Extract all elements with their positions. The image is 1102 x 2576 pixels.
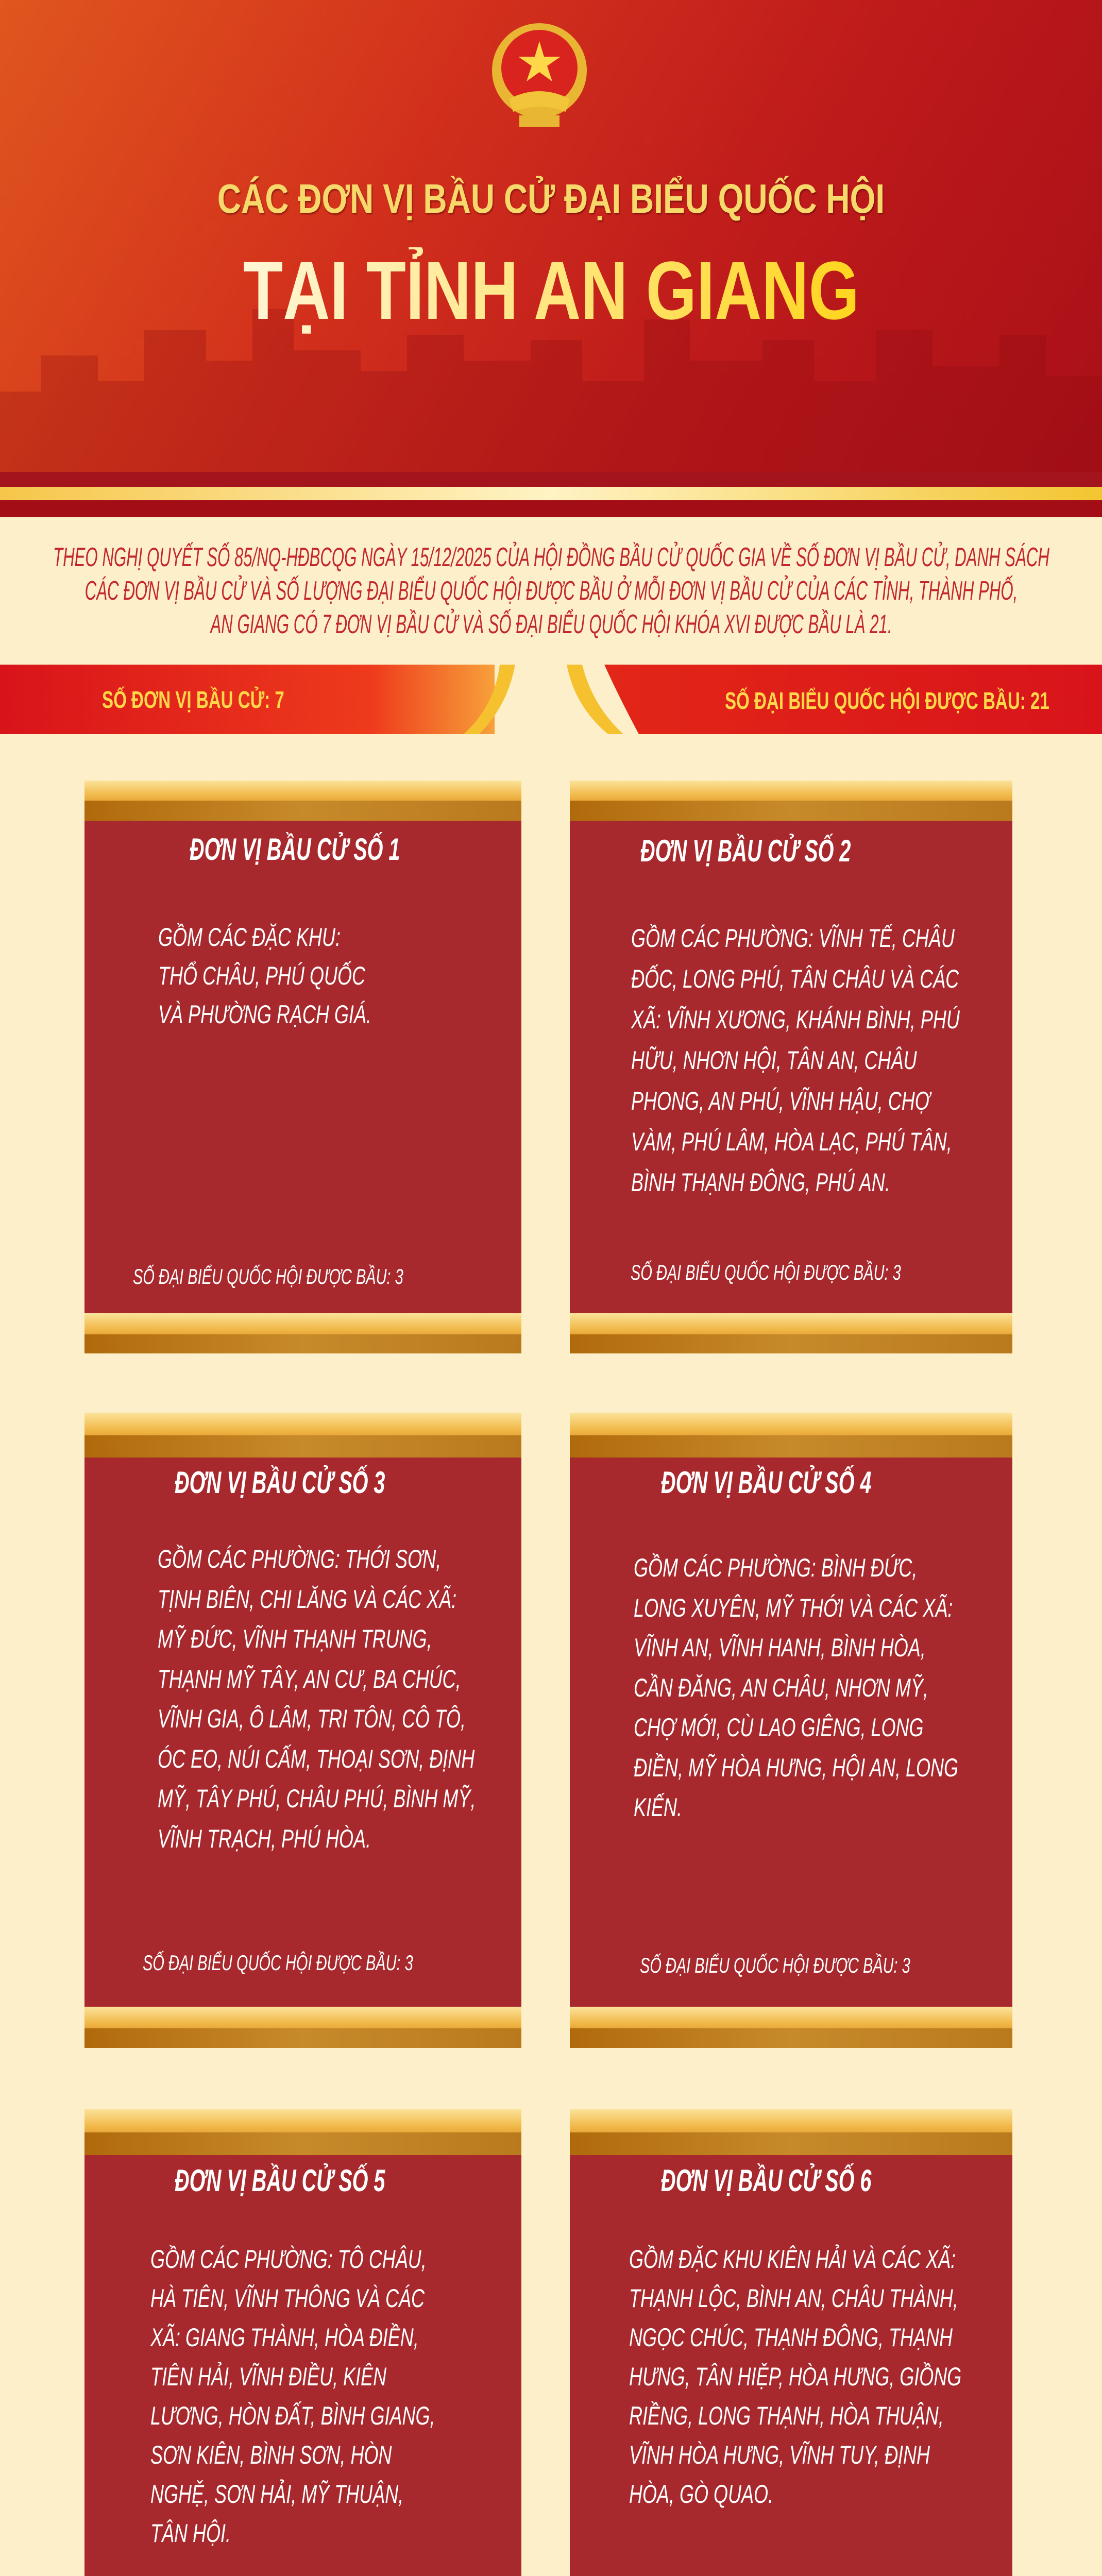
text block: TỊNH BIÊN, CHI LĂNG VÀ CÁC XÃ: bbox=[158, 1585, 456, 1614]
text block: GỒM CÁC ĐẶC KHU: bbox=[158, 923, 341, 952]
intro text: THEO NGHỊ QUYẾT SỐ 85/NQ-HĐBCQG NGÀY 15/12/2025 CỦA HỘI ĐỒNG BẦU CỬ QUỐC GIA VỀ SỐ ĐƠN VỊ BẦU CỬ, DANH SÁCH bbox=[53, 543, 1049, 572]
text block bbox=[634, 1553, 958, 1822]
text block: RIỀNG, LONG THẠNH, HÒA THUẬN, bbox=[629, 2401, 944, 2430]
text block: GỒM CÁC PHƯỜNG: VĨNH TẾ, CHÂU bbox=[631, 924, 955, 953]
header bbox=[0, 0, 1102, 517]
text block: GỒM CÁC PHƯỜNG: TÔ CHÂU, bbox=[150, 2245, 427, 2274]
text block: TIÊN HẢI, VĨNH ĐIỀU, KIÊN bbox=[150, 2362, 386, 2391]
text block: SƠN KIÊN, BÌNH SƠN, HÒN bbox=[150, 2441, 392, 2469]
heading: ĐƠN VỊ BẦU CỬ SỐ 3 bbox=[175, 1465, 385, 1500]
intro text: AN GIANG CÓ 7 ĐƠN VỊ BẦU CỬ VÀ SỐ ĐẠI BIỂU QUỐC HỘI KHÓA XVI ĐƯỢC BẦU LÀ 21. bbox=[210, 609, 892, 639]
text block bbox=[629, 2244, 961, 2509]
text block: TÂN HỘI. bbox=[150, 2519, 231, 2548]
text block: GỒM CÁC PHƯỜNG: THỚI SƠN, bbox=[158, 1545, 441, 1573]
panel: unit 4 bbox=[570, 1413, 1012, 2048]
text block: HƯNG, TÂN HIỆP, HÒA HƯNG, GIỒNG bbox=[629, 2362, 961, 2391]
text block: GỒM ĐẶC KHU KIÊN HẢI VÀ CÁC XÃ: bbox=[629, 2245, 956, 2274]
text block bbox=[631, 924, 960, 1197]
text block: HÒA, GÒ QUAO. bbox=[629, 2480, 773, 2509]
text block: XÃ: VĨNH XƯƠNG, KHÁNH BÌNH, PHÚ bbox=[631, 1005, 960, 1034]
banner: totals bbox=[0, 665, 1102, 734]
text block: ÓC EO, NÚI CẤM, THOẠI SƠN, ĐỊNH bbox=[158, 1744, 474, 1773]
heading: ĐƠN VỊ BẦU CỬ SỐ 5 bbox=[175, 2163, 385, 2198]
text block: NGHỆ, SƠN HẢI, MỸ THUẬN, bbox=[150, 2480, 403, 2509]
text block: BÌNH THẠNH ĐÔNG, PHÚ AN. bbox=[631, 1168, 890, 1197]
text block: GỒM CÁC PHƯỜNG: BÌNH ĐỨC, bbox=[634, 1553, 917, 1582]
skyline bbox=[0, 309, 1102, 517]
label: number of units: SỐ ĐƠN VỊ BẦU CỬ: 7 bbox=[102, 686, 284, 713]
panel: unit 5 bbox=[84, 2109, 521, 2576]
text block: ĐIỀN, MỸ HÒA HƯNG, HỘI AN, LONG bbox=[634, 1753, 958, 1782]
text block: KIẾN. bbox=[634, 1793, 682, 1822]
panel: unit 3 bbox=[84, 1413, 521, 2048]
intro text bbox=[53, 542, 1049, 639]
text block: XÃ: GIANG THÀNH, HÒA ĐIỀN, bbox=[150, 2323, 419, 2352]
text block: HỮU, NHƠN HỘI, TÂN AN, CHÂU bbox=[631, 1046, 917, 1075]
text block: CHỢ MỚI, CÙ LAO GIÊNG, LONG bbox=[634, 1713, 923, 1742]
text block: LONG XUYÊN, MỸ THỚI VÀ CÁC XÃ: bbox=[634, 1593, 953, 1622]
text block bbox=[158, 923, 371, 1029]
panel: unit 2 bbox=[570, 781, 1012, 1353]
text block: MỸ ĐỨC, VĨNH THẠNH TRUNG, bbox=[158, 1624, 432, 1653]
text block bbox=[150, 2245, 435, 2548]
heading: ĐƠN VỊ BẦU CỬ SỐ 1 bbox=[190, 832, 400, 867]
text block: VÀM, PHÚ LÂM, HÒA LẠC, PHÚ TÂN, bbox=[631, 1127, 952, 1156]
text block: PHONG, AN PHÚ, VĨNH HẬU, CHỢ bbox=[631, 1087, 930, 1115]
intro text: CÁC ĐƠN VỊ BẦU CỬ VÀ SỐ LƯỢNG ĐẠI BIỂU QUỐC HỘI ĐƯỢC BẦU Ở MỖI ĐƠN VỊ BẦU CỬ CỦA CÁC TỈNH, THÀNH PHỐ, bbox=[84, 576, 1018, 606]
text block: VÀ PHƯỜNG RẠCH GIÁ. bbox=[158, 1000, 371, 1029]
text block: MỸ, TÂY PHÚ, CHÂU PHÚ, BÌNH MỸ, bbox=[158, 1784, 476, 1813]
panel: unit 6 bbox=[570, 2109, 1012, 2576]
text block: ĐỐC, LONG PHÚ, TÂN CHÂU VÀ CÁC bbox=[631, 964, 959, 993]
heading: ĐƠN VỊ BẦU CỬ SỐ 4 bbox=[661, 1465, 871, 1500]
label: number of delegates: SỐ ĐẠI BIỂU QUỐC HỘI ĐƯỢC BẦU: 21 bbox=[725, 687, 1049, 714]
text block: LƯƠNG, HÒN ĐẤT, BÌNH GIANG, bbox=[150, 2401, 435, 2430]
footer: SỐ ĐẠI BIỂU QUỐC HỘI ĐƯỢC BẦU: 3 bbox=[640, 1953, 910, 1977]
text block: VĨNH TRẠCH, PHÚ HÒA. bbox=[158, 1824, 371, 1853]
footer: SỐ ĐẠI BIỂU QUỐC HỘI ĐƯỢC BẦU: 3 bbox=[133, 1264, 403, 1289]
panel: unit 1 bbox=[84, 781, 521, 1353]
text block: VĨNH AN, VĨNH HANH, BÌNH HÒA, bbox=[634, 1633, 926, 1662]
text block: NGỌC CHÚC, THẠNH ĐÔNG, THẠNH bbox=[629, 2323, 953, 2352]
subtitle: TẠI TỈNH AN GIANG bbox=[243, 244, 859, 336]
text block: CẦN ĐĂNG, AN CHÂU, NHƠN MỸ, bbox=[634, 1673, 928, 1702]
text block: VĨNH HÒA HƯNG, VĨNH TUY, ĐỊNH bbox=[629, 2441, 930, 2469]
icon: national emblem bbox=[492, 23, 587, 127]
heading: ĐƠN VỊ BẦU CỬ SỐ 6 bbox=[661, 2163, 871, 2198]
text block: VĨNH GIA, Ô LÂM, TRI TÔN, CÔ TÔ, bbox=[158, 1704, 466, 1733]
text block: THỔ CHÂU, PHÚ QUỐC bbox=[158, 961, 365, 990]
text block: THẠNH MỸ TÂY, AN CƯ, BA CHÚC, bbox=[158, 1664, 461, 1693]
text block: THẠNH LỘC, BÌNH AN, CHÂU THÀNH, bbox=[629, 2284, 958, 2313]
text block: HÀ TIÊN, VĨNH THÔNG VÀ CÁC bbox=[150, 2284, 425, 2313]
title: CÁC ĐƠN VỊ BẦU CỬ ĐẠI BIỂU QUỐC HỘI bbox=[217, 176, 885, 222]
text block bbox=[158, 1545, 476, 1853]
footer: SỐ ĐẠI BIỂU QUỐC HỘI ĐƯỢC BẦU: 3 bbox=[631, 1260, 901, 1284]
footer: SỐ ĐẠI BIỂU QUỐC HỘI ĐƯỢC BẦU: 3 bbox=[143, 1951, 413, 1975]
heading: ĐƠN VỊ BẦU CỬ SỐ 2 bbox=[640, 834, 851, 868]
